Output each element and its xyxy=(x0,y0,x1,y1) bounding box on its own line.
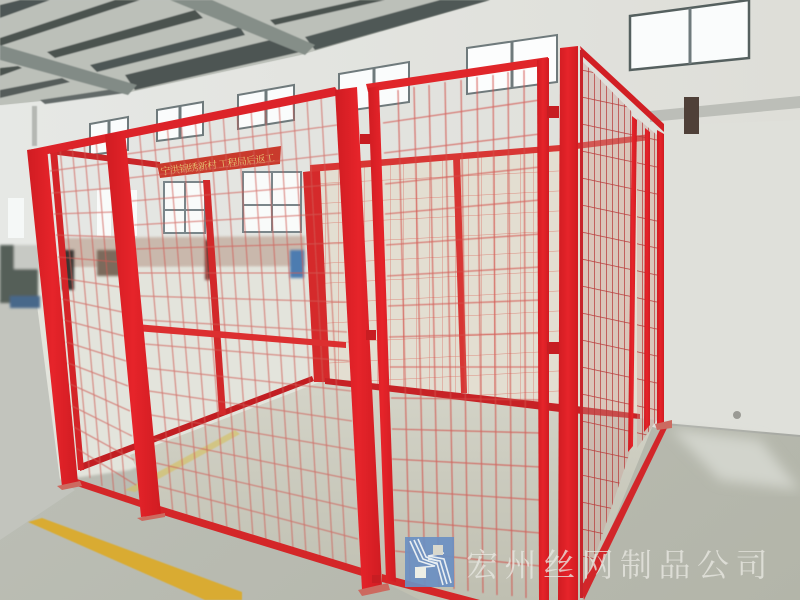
post feet xyxy=(57,481,82,490)
grey duct and dark bracket on the wall xyxy=(650,96,800,134)
bottom rails xyxy=(62,474,140,507)
bright workshop floor xyxy=(0,266,320,480)
right concrete wall xyxy=(660,120,800,436)
outer left floor xyxy=(0,290,75,540)
top rails xyxy=(28,87,340,154)
floor stain near right wall xyxy=(670,428,800,490)
post third xyxy=(335,87,382,590)
mesh: right door panel xyxy=(383,70,540,598)
post right door right xyxy=(537,58,549,600)
side far posts xyxy=(644,128,650,432)
thin post beside corner xyxy=(580,50,583,598)
post right door left xyxy=(368,86,396,582)
mesh: left door panel xyxy=(50,140,136,502)
back wall xyxy=(0,0,800,430)
wall bolt xyxy=(733,411,741,419)
mesh: side panel far xyxy=(637,118,657,448)
upper windows row xyxy=(90,0,749,155)
company name: 宏州丝网制品公司 xyxy=(466,547,774,583)
inner back wall of the enclosure xyxy=(310,135,660,418)
main corner post xyxy=(558,46,578,600)
ceiling with beams xyxy=(0,0,490,146)
mesh: side panel near xyxy=(583,62,632,592)
lower windows seen through the fence xyxy=(8,172,301,238)
hinges xyxy=(360,106,559,583)
back fence mesh xyxy=(310,148,560,408)
far wall dado band xyxy=(60,236,305,268)
post second xyxy=(105,131,161,517)
yellow floor line xyxy=(28,430,242,600)
machinery at left xyxy=(0,240,304,308)
back and side inner fence frame xyxy=(50,134,650,471)
company logo: blue square xyxy=(405,537,454,587)
side middle post xyxy=(628,116,637,452)
enclosure floor xyxy=(130,382,655,600)
banner: 宁洪锦绣新村 工程局后返工 xyxy=(160,151,276,178)
door middle rail xyxy=(136,324,346,348)
post far left xyxy=(27,147,78,487)
fence frame xyxy=(27,46,672,600)
mesh: left front panel xyxy=(127,97,358,564)
